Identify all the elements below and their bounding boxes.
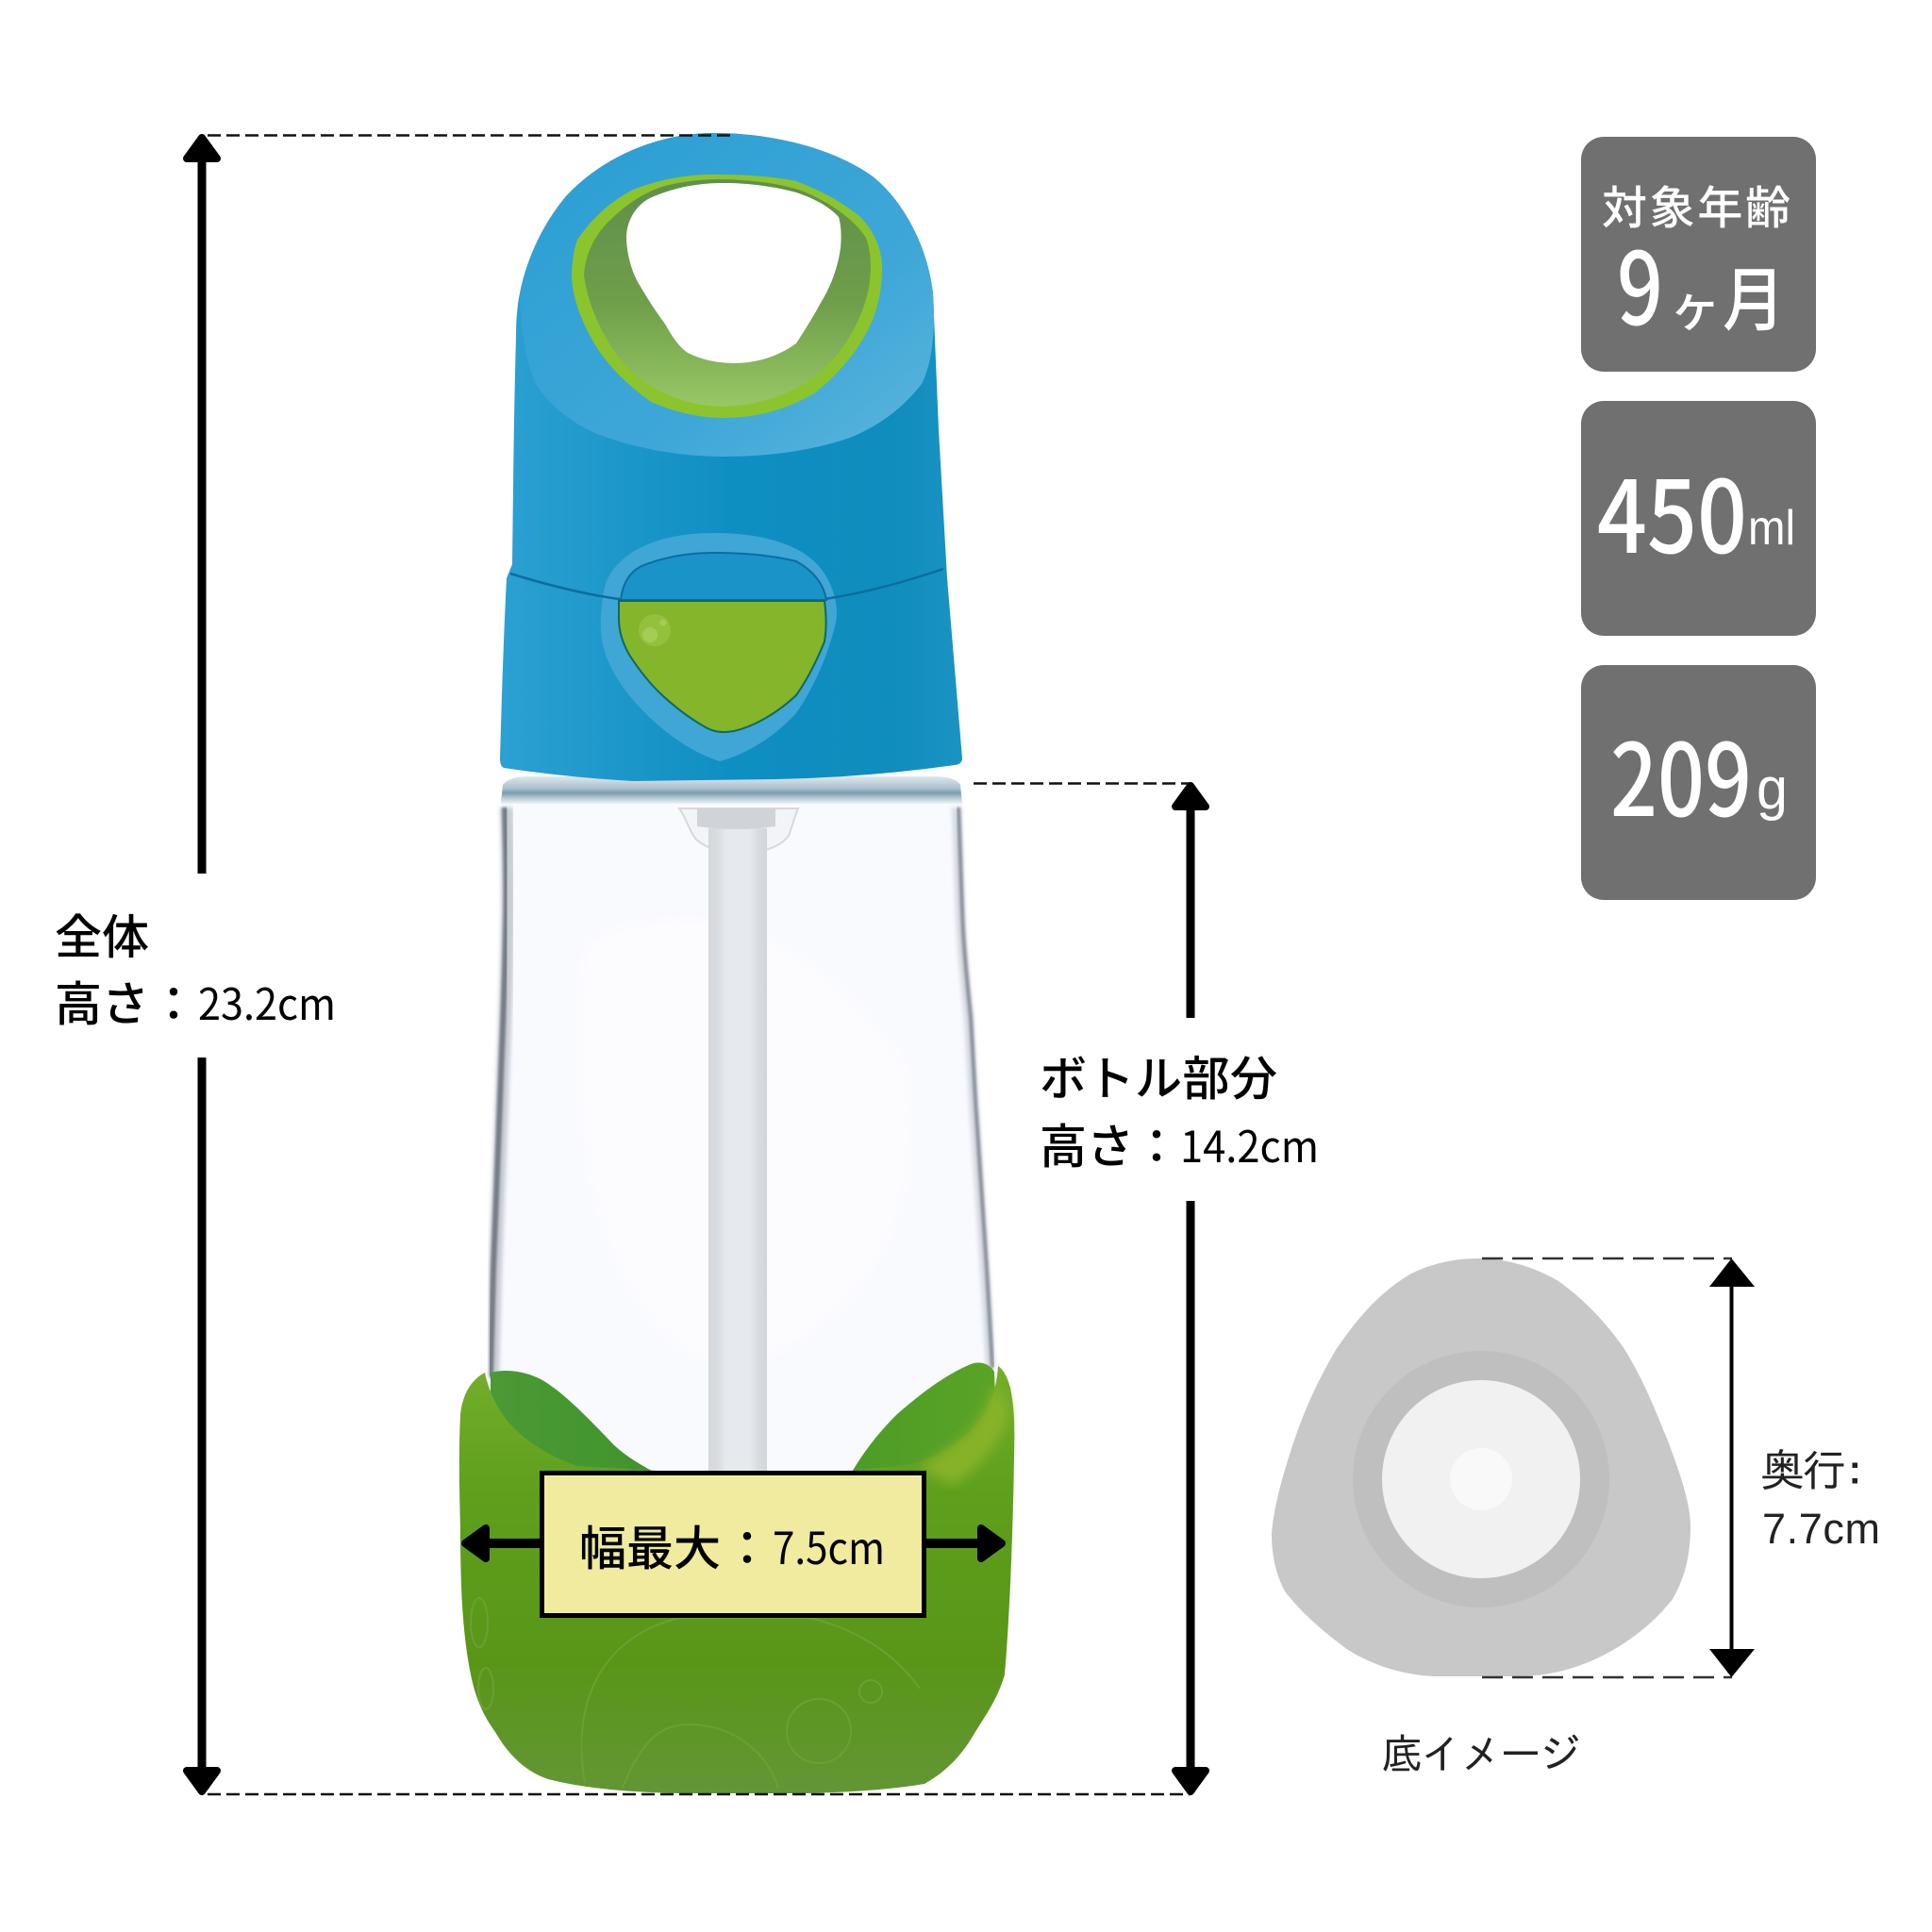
body left edge xyxy=(492,808,508,1377)
label: overall height: 23.2cm xyxy=(198,971,336,1033)
label: depth xyxy=(1760,1447,1880,1553)
silicone sleeve xyxy=(459,1362,1014,1793)
label: bottle height: 高さ xyxy=(1040,1109,1134,1177)
callout: max width: 7.5cm xyxy=(773,1512,885,1577)
ring inner xyxy=(584,179,871,407)
callout: max width xyxy=(541,1474,924,1615)
badge: weight xyxy=(1581,665,1816,900)
base dashed guides xyxy=(1482,1258,1732,1677)
arrow: depth xyxy=(1709,1258,1755,1677)
label: bottle height: ： xyxy=(1133,1109,1180,1177)
label: bottle height: 14.2cm xyxy=(1180,1113,1319,1175)
body right edge xyxy=(957,808,991,1368)
bottle clear body xyxy=(486,776,996,1509)
label: bottle height: ボトル部分 xyxy=(1040,1041,1277,1109)
badge: weight: 209 xyxy=(1610,700,1752,845)
badge: target age: ヶ xyxy=(1670,266,1721,341)
callout: max width: 幅最大 xyxy=(579,1511,721,1579)
seam line xyxy=(510,569,943,599)
cap xyxy=(500,133,962,781)
badge: weight: g xyxy=(1757,757,1788,822)
label: bottle height xyxy=(1040,1041,1319,1177)
cap highlight band xyxy=(520,133,934,457)
handle opening xyxy=(626,183,841,363)
label: overall height: 高さ xyxy=(55,967,149,1035)
base centre xyxy=(1450,1448,1512,1510)
arrow: width xyxy=(465,1528,1002,1558)
dashed guide lines xyxy=(208,136,1191,1794)
label: overall height: 全体 xyxy=(55,900,149,968)
base diagram xyxy=(1272,1258,1690,1676)
badge: capacity xyxy=(1581,401,1816,636)
arrow: bottle height xyxy=(1175,786,1206,1791)
green ring xyxy=(572,175,882,418)
button logo xyxy=(639,614,671,646)
base inner circle xyxy=(1382,1380,1580,1578)
label: depth: 奥行: xyxy=(1760,1447,1866,1491)
arrow: overall height xyxy=(187,138,217,1791)
neck band xyxy=(501,776,962,804)
callout: max width: ： xyxy=(724,1511,771,1579)
badge: target age: 対象年齢 xyxy=(1602,171,1790,237)
sleeve highlight xyxy=(920,1387,1009,1486)
label: base image: 底イメージ xyxy=(1381,1733,1581,1774)
badge: capacity: ml xyxy=(1748,501,1795,556)
base ring xyxy=(1353,1351,1609,1607)
base outline xyxy=(1272,1258,1690,1676)
straw xyxy=(697,808,775,1479)
label: depth: 7.7cm xyxy=(1762,1505,1880,1553)
green button xyxy=(619,601,826,732)
button surround xyxy=(601,533,837,761)
label: overall height xyxy=(55,900,336,1035)
badge: target age: 月 xyxy=(1723,244,1785,345)
bottle illustration xyxy=(459,133,1014,1793)
badge: target age xyxy=(1581,137,1816,372)
straw collar xyxy=(679,808,798,853)
button upper xyxy=(621,553,826,600)
badge: target age: 9 xyxy=(1617,208,1663,354)
label: overall height: ： xyxy=(150,967,197,1035)
badge: capacity: 450 xyxy=(1597,437,1747,582)
